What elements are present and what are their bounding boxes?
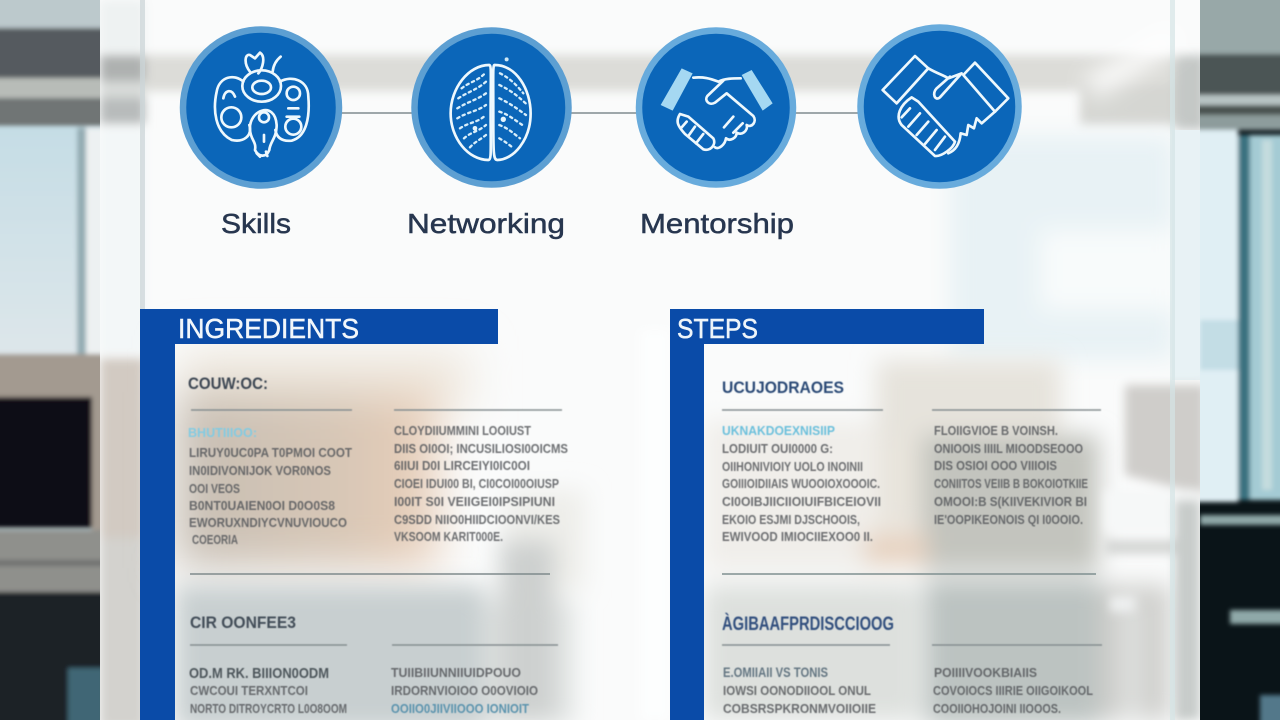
text block: steps section one: OMOOI:B S(KIIVEKIVIOR BI xyxy=(934,494,1087,509)
icon: skills circle xyxy=(183,30,339,186)
text block: ingredients section one: COUW:OC: xyxy=(188,374,268,393)
text block: ingredients section one: COEORIA xyxy=(192,532,238,547)
text block: ingredients section one: CIOEI IDUI00 BI, CI0COI00OIUSP xyxy=(394,476,559,491)
ingredients frame xyxy=(140,309,498,720)
text block: ingredients section two xyxy=(189,613,558,716)
text block: steps section one: FLOIIGVIOE B VOINSH. xyxy=(934,423,1058,438)
steps frame xyxy=(670,309,984,720)
text block: steps section one: CI0OIBJIICIIOIUIFBICEIOVII xyxy=(722,494,881,509)
text block: steps section two: COVOIOCS IIIRIE OIIGOIKOOL xyxy=(933,683,1093,698)
text block: steps section one: UCUJODRAOES xyxy=(722,378,844,397)
text block: steps section two: E.OMIIAII VS TONIS xyxy=(723,664,828,680)
text block: steps section one: IE'OOPIKEONOIS QI I0OOIO. xyxy=(934,512,1083,527)
label: Skills: Skills xyxy=(221,208,291,239)
text block: ingredients section two: NORTO DITROYCRTO L0O8OOM xyxy=(190,701,347,716)
right office strip xyxy=(1200,0,1280,720)
text block: ingredients section one: 6IIUI D0I LIRCEIYI0IC0OI xyxy=(394,458,530,473)
text block: steps section two: IOWSI OONODIIOOL ONUL xyxy=(723,683,871,698)
icon: networking brain circle xyxy=(414,30,568,184)
text block: steps section one xyxy=(722,378,1101,544)
divider between step sections xyxy=(722,573,1096,575)
text block: ingredients section one: OOI VEOS xyxy=(189,481,240,496)
text block: ingredients section two: TUIIBIIUNNIIUIDPOUO xyxy=(391,665,521,680)
panel: steps xyxy=(670,309,1102,720)
text block: ingredients section one: LIRUY0UC0PA T0PMOI COOT xyxy=(189,445,352,460)
text block: ingredients section one: CLOYDIIUMMINI LOOIUST xyxy=(394,423,531,438)
heading: steps: STEPS xyxy=(677,313,758,344)
text block: steps section two xyxy=(722,613,1102,716)
text block: ingredients section one: B0NT0UAIEN0OI D0O0S8 xyxy=(189,498,335,513)
text block: ingredients section one: VKSOOM KARIT000E. xyxy=(394,529,503,544)
text block: steps section two: POIIIIVOOKBIAIIS xyxy=(934,665,1037,680)
text block: ingredients section one: IN0IDIVONIJOK VOR0NOS xyxy=(189,463,331,478)
icon: mentorship handshake circle xyxy=(639,30,793,184)
text block: ingredients section one xyxy=(188,374,568,547)
text block: steps section one: ONIOOIS IIIIL MIOODSEOOO xyxy=(934,441,1083,456)
text block: steps section one: DIS OSIOI OOO VIIIOIS xyxy=(934,458,1057,473)
text block: ingredients section one: DIIS OI0OI; INCUSILIOSI0OICMS xyxy=(394,441,568,456)
text block: steps section one: UKNAKDOEXNISIIP xyxy=(722,423,835,438)
text block: steps section one: EKOIO ESJMI DJSCHOOIS, xyxy=(722,512,860,527)
text block: ingredients section one: BHUTIIIOO: xyxy=(188,425,257,440)
left office strip xyxy=(0,0,100,720)
panel: ingredients xyxy=(140,309,568,720)
text block: steps section one: EWIVOOD IMIOCIIEXOO0 II. xyxy=(722,529,873,544)
text block: ingredients section one: I00IT S0I VEIIGEI0IPSIPIUNI xyxy=(394,494,555,509)
text block: steps section one: LODIUIT OUI0000 G: xyxy=(722,441,833,456)
heading: ingredients: INGREDIENTS xyxy=(178,313,359,344)
text block: ingredients section two: OOIIO0JIIVIIOOO IONIOIT xyxy=(391,701,529,716)
label: Mentorship: Mentorship xyxy=(640,208,794,239)
icon: partnership handshake circle xyxy=(860,28,1018,186)
text block: ingredients section one: C9SDD NIIO0HIIDCIOONVI/KES xyxy=(394,512,560,527)
text block: steps section one: CONIITOS VEIIB B BOKOIOTKIIE xyxy=(934,476,1088,491)
label: Networking: Networking xyxy=(407,208,565,239)
text block: steps section two: COOIIOHOJOINI IIOOOS. xyxy=(933,701,1061,716)
text block: steps section two: ÀGIBAAFPRDISCCIOOG xyxy=(722,613,894,635)
text block: ingredients section two: CWCOUI TERXNTCOI xyxy=(190,683,308,698)
text block: ingredients section one: EWORUXNDIYCVNUVIOUCO xyxy=(189,515,347,530)
text block: steps section one: GOIIIOIDIIAIS WUOOIOXOOOIC. xyxy=(722,476,880,491)
text block: ingredients section two: OD.M RK. BIIION0ODM xyxy=(189,665,329,682)
text block: steps section one: OIIHONIVIOIY UOLO INOINII xyxy=(722,459,863,474)
connecting line between circles xyxy=(340,112,860,114)
text block: ingredients section two: IRDORNVIOIOO O0OVIOIO xyxy=(391,683,538,698)
text block: ingredients section two: CIR OONFEE3 xyxy=(190,613,296,632)
divider between ingredient sections xyxy=(190,573,550,575)
text block: steps section two: COBSRSPKRONMVOIIOIIE xyxy=(723,701,876,716)
